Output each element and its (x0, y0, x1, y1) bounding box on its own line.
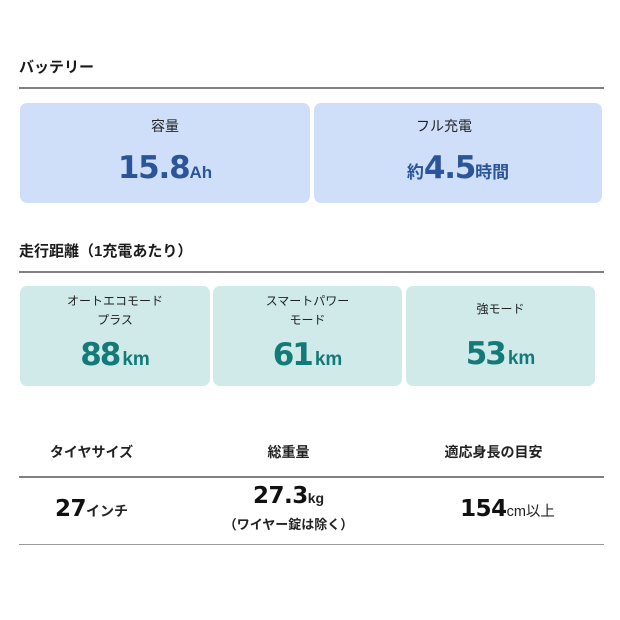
total weight note: （ワイヤー錠は除く） (224, 517, 353, 532)
smart power mode label: スマートパワー (266, 294, 349, 308)
divider: range (19, 271, 604, 273)
divider: battery (19, 87, 604, 89)
auto eco mode plus label (67, 294, 163, 327)
panel: capacity (20, 103, 310, 203)
smart power mode label (266, 294, 349, 327)
capacity value: 15.8Ah (118, 150, 212, 186)
auto eco mode plus label: プラス (97, 313, 133, 327)
total weight value: 27.3kg (253, 483, 324, 509)
capacity label: 容量 (151, 118, 179, 134)
divider: spec table header (19, 476, 604, 478)
heading: battery: バッテリー (19, 59, 94, 76)
auto eco mode plus label: オートエコモード (67, 294, 163, 308)
panel: smart power mode (213, 286, 402, 386)
full charge value: 約4.5時間 (407, 150, 509, 186)
heading: range: 走行距離（1充電あたり） (19, 243, 192, 260)
divider: spec table bottom (19, 544, 604, 545)
strong mode label: 強モード (476, 302, 524, 316)
total weight heading: 総重量 (268, 444, 310, 460)
auto eco mode plus value: 88km (80, 337, 150, 373)
height guide value: 154cm以上 (460, 496, 555, 522)
strong mode value: 53km (466, 336, 535, 372)
smart power mode label: モード (289, 313, 326, 327)
panel: auto eco mode plus (20, 286, 210, 386)
smart power mode value: 61km (273, 337, 342, 373)
full charge label: フル充電 (416, 118, 472, 134)
height guide heading: 適応身長の目安 (444, 444, 542, 460)
panel: full charge (314, 103, 602, 203)
tire size value: 27インチ (55, 496, 128, 522)
panel: strong mode (406, 286, 595, 386)
tire size heading: タイヤサイズ (50, 444, 133, 460)
